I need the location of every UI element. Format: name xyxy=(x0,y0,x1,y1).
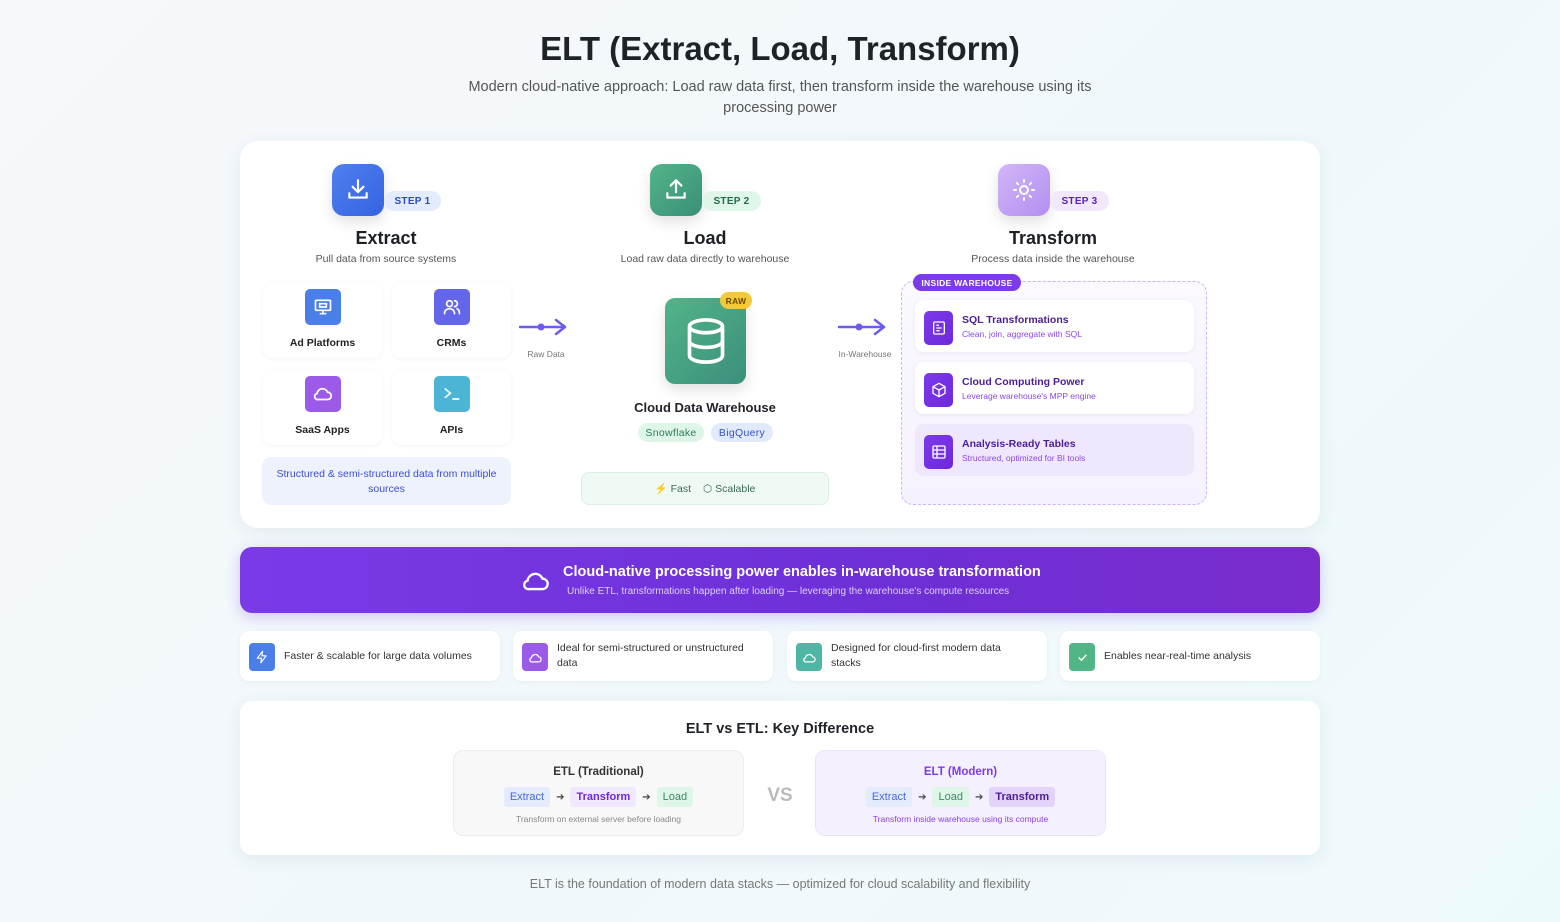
load sub: Load raw data directly to warehouse xyxy=(621,253,789,265)
feature: semi-structured: Ideal for semi-structured or unstructured data xyxy=(557,642,744,669)
tile: saas apps: SaaS Apps xyxy=(295,424,350,436)
step 2 pill xyxy=(702,191,761,211)
box: etl: ➔ xyxy=(556,792,564,803)
transform heading: Transform xyxy=(1009,228,1097,248)
feature: real-time xyxy=(1060,631,1320,681)
tile: ad platforms xyxy=(263,283,382,358)
card: cloud computing xyxy=(915,362,1194,414)
feature: cloud-first: Designed for cloud-first modern data stacks xyxy=(831,642,1001,669)
pill: bigquery xyxy=(711,423,773,442)
box: elt: Load xyxy=(938,791,963,803)
box: elt: Transform xyxy=(995,791,1049,803)
box: etl: Transform xyxy=(576,791,630,803)
panel: elt vs etl xyxy=(240,701,1320,855)
extract sub: Pull data from source systems xyxy=(316,253,456,265)
arrow: raw data: Raw Data xyxy=(527,349,565,359)
step 1 icon xyxy=(332,164,384,216)
badge: inside warehouse: INSIDE WAREHOUSE xyxy=(921,278,1013,288)
load heading: Load xyxy=(684,228,726,248)
step 3 icon xyxy=(998,164,1050,216)
footer: ELT is the foundation of modern data stacks — optimized for cloud scalability and flexibility xyxy=(530,877,1030,891)
tile: apis xyxy=(392,370,511,445)
feature: faster: Faster & scalable for large data volumes xyxy=(284,650,472,662)
panel: inside warehouse xyxy=(901,281,1207,505)
pill: snowflake xyxy=(638,423,704,442)
pill: snowflake: Snowflake xyxy=(645,426,697,438)
card: sql transformations: Clean, join, aggregate with SQL xyxy=(962,329,1082,339)
panel: main pipeline xyxy=(240,141,1320,528)
box: fast scalable: ⬡ Scalable xyxy=(703,482,755,494)
feature: faster xyxy=(240,631,500,681)
note: sources: Structured & semi-structured data from multiple sources xyxy=(276,468,496,495)
step 3 pill xyxy=(1050,191,1109,211)
step 3 pill: STEP 3 xyxy=(1061,196,1098,206)
title: ELT (Extract, Load, Transform) xyxy=(540,30,1020,67)
badge: raw: RAW xyxy=(726,296,746,306)
tile: crms: CRMs xyxy=(437,337,466,349)
feature: semi-structured xyxy=(513,631,773,681)
card: cloud computing: Leverage warehouse's MPP engine xyxy=(962,391,1096,401)
card: analysis-ready tables xyxy=(915,424,1194,476)
box: elt: Extract xyxy=(872,791,906,803)
card: analysis-ready tables: Analysis-Ready Tables xyxy=(962,438,1076,450)
tile: crms xyxy=(392,283,511,358)
extract heading: Extract xyxy=(355,228,417,248)
box: elt: Transform inside warehouse using its compute xyxy=(873,814,1048,824)
card: sql transformations: SQL Transformations xyxy=(962,314,1069,326)
box: fast scalable xyxy=(581,472,829,505)
card: analysis-ready tables: Structured, optimized for BI tools xyxy=(962,453,1085,463)
box: elt: ➔ xyxy=(918,792,926,803)
step 2 icon xyxy=(650,164,702,216)
arrow: in-warehouse xyxy=(838,318,892,359)
subtitle: Modern cloud-native approach: Load raw data first, then transform inside the warehouse using its processing power xyxy=(468,79,1092,116)
icon: cloud xyxy=(523,572,549,590)
arrow: in-warehouse: In-Warehouse xyxy=(838,349,892,359)
badge: raw xyxy=(720,292,752,309)
box: etl: ETL (Traditional) xyxy=(553,766,644,778)
box: etl xyxy=(453,750,744,836)
transform sub: Process data inside the warehouse xyxy=(971,253,1135,265)
note: sources xyxy=(262,457,511,505)
badge: inside warehouse xyxy=(913,274,1021,291)
comparison title: ELT vs ETL: Key Difference xyxy=(686,721,874,737)
box: fast scalable: ⚡ Fast xyxy=(655,483,691,495)
step 2 pill: STEP 2 xyxy=(713,196,750,206)
warehouse label: Cloud Data Warehouse xyxy=(634,400,776,415)
box: etl: ➔ xyxy=(642,792,651,803)
card: cloud computing: Cloud Computing Power xyxy=(962,376,1084,388)
pill: bigquery: BigQuery xyxy=(719,426,765,438)
box: etl: Transform on external server before loading xyxy=(516,814,681,824)
banner title: Cloud-native processing power enables in-warehouse transformation xyxy=(563,564,1041,580)
feature: cloud-first xyxy=(787,631,1047,681)
step 1 pill: STEP 1 xyxy=(394,196,431,206)
banner sub: Unlike ETL, transformations happen after loading — leveraging the warehouse's compute resources xyxy=(567,586,1009,597)
icon: database xyxy=(665,298,746,384)
arrow: raw data xyxy=(519,318,566,359)
box: elt xyxy=(815,750,1106,836)
step 1 pill xyxy=(384,191,441,211)
tile: saas apps xyxy=(263,370,382,445)
box: etl: Extract xyxy=(510,791,544,803)
box: elt: ➔ xyxy=(975,792,983,803)
vs label: VS xyxy=(767,785,793,806)
tile: ad platforms: Ad Platforms xyxy=(290,337,355,349)
tile: apis: APIs xyxy=(440,424,463,436)
feature: real-time: Enables near-real-time analysis xyxy=(1104,650,1251,662)
banner: cloud-native xyxy=(240,547,1320,613)
box: elt: ELT (Modern) xyxy=(924,766,997,778)
box: etl: Load xyxy=(663,791,687,803)
card: sql transformations xyxy=(915,300,1194,352)
